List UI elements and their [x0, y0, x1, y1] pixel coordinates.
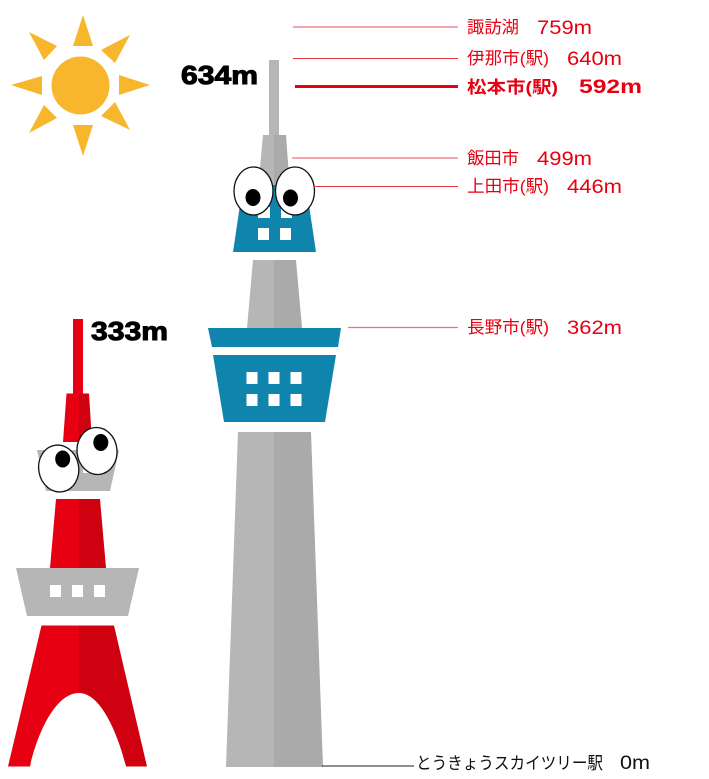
- label: Tokyo Tower height: 333m: [91, 316, 168, 346]
- icon: Tokyo Tower eyes: [35, 426, 119, 495]
- callout: Nagano: [348, 318, 622, 339]
- callout: Ina: 伊那市(駅): [467, 49, 549, 68]
- callout: Ueda: 446m: [567, 177, 622, 198]
- callout: Iida: 499m: [537, 149, 592, 170]
- callout: Matsumoto: 592m: [579, 77, 642, 98]
- icon: sun: [11, 15, 150, 156]
- callout: Ueda: [314, 177, 622, 198]
- callout: Matsumoto: 松本市(駅): [467, 77, 558, 97]
- callout: Matsumoto: [295, 77, 642, 98]
- callout: Tokyo Skytree Station: 0m: [620, 753, 650, 774]
- callout: Suwa Lake: [293, 18, 592, 39]
- icon: Skytree eyes: [234, 167, 314, 215]
- callout: Ueda: 上田市(駅): [467, 177, 549, 196]
- tower: Tokyo Skytree: [208, 60, 341, 767]
- label: Skytree height: 634m: [181, 60, 258, 90]
- callout: Suwa Lake: 諏訪湖: [467, 18, 519, 37]
- callout: Nagano: 長野市(駅): [467, 318, 549, 337]
- callout: Tokyo Skytree Station: [322, 753, 650, 774]
- callout: Iida: [292, 149, 592, 170]
- callout: Iida: 飯田市: [467, 149, 519, 168]
- callout: Suwa Lake: 759m: [537, 18, 592, 39]
- callout: Ina: 640m: [567, 49, 622, 70]
- callout: Ina: [293, 49, 622, 70]
- tower: Tokyo Tower: [8, 319, 147, 766]
- callout: Tokyo Skytree Station: とうきょうスカイツリー駅: [416, 754, 603, 773]
- callout: Nagano: 362m: [567, 318, 622, 339]
